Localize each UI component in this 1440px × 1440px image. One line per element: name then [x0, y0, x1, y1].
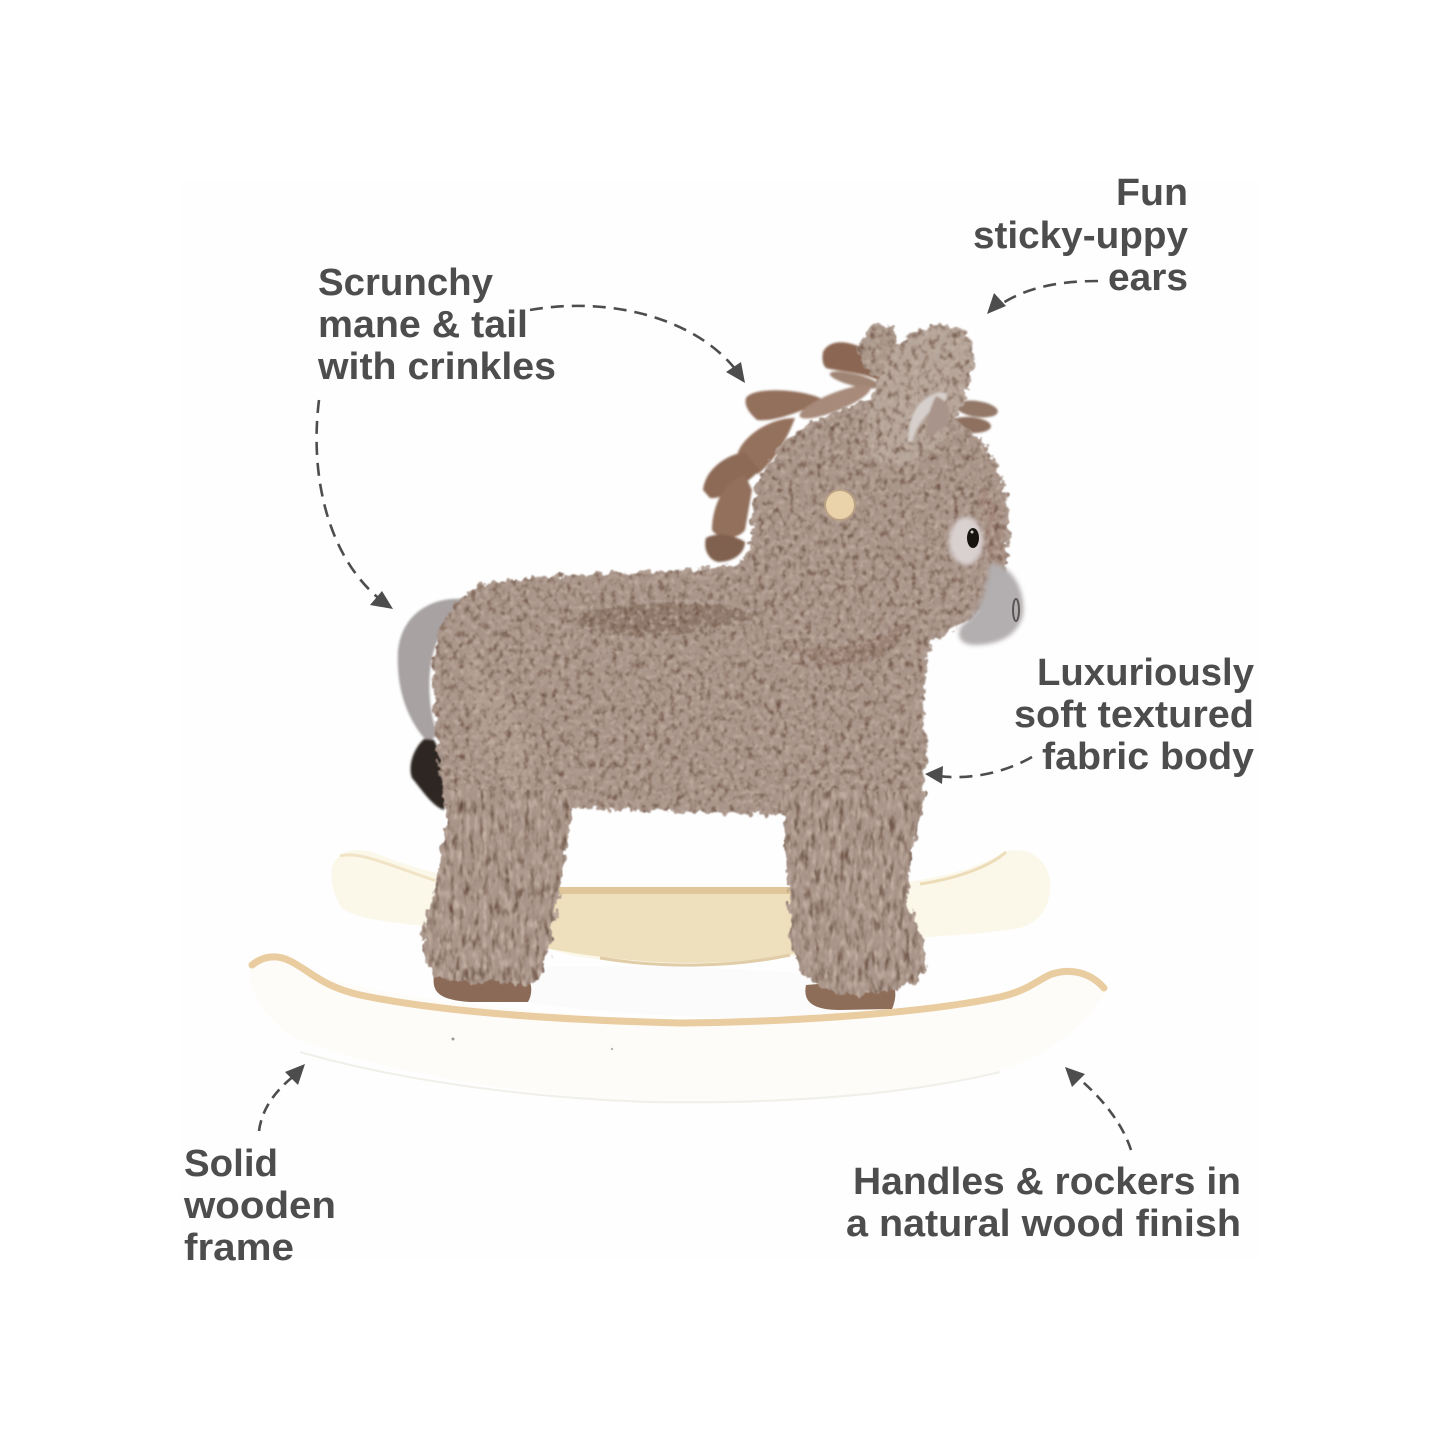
rockers label: a natural wood finish [846, 1203, 1241, 1245]
body label: Luxuriously [1037, 652, 1254, 694]
arrow: to tail [317, 400, 393, 609]
body label: fabric body [1042, 736, 1254, 778]
arrow: to body [925, 757, 1032, 784]
background panel [180, 180, 1260, 1260]
legs fur [423, 790, 926, 995]
callout: ears [973, 172, 1188, 314]
ears label: ears [1108, 257, 1188, 299]
inner ear [908, 392, 950, 442]
arrow: to mane [530, 306, 745, 383]
callout: mane [317, 262, 745, 609]
tail [398, 599, 470, 810]
callout: fabric body [925, 652, 1254, 784]
hooves [434, 970, 895, 1010]
callout: wooden frame [183, 1064, 336, 1269]
rockers label [846, 1161, 1241, 1245]
mane label: with crinkles [317, 346, 556, 388]
arrow: to rockers [1065, 1067, 1131, 1150]
ears label [973, 172, 1188, 299]
ears label: sticky-uppy [973, 215, 1188, 257]
ears label: Fun [1116, 172, 1188, 214]
back rocker [331, 850, 1050, 965]
body label [1014, 652, 1254, 778]
frame label: Solid [184, 1143, 278, 1185]
wooden peg [825, 490, 855, 520]
body label: soft textured [1014, 694, 1254, 736]
arrow: to ears [987, 281, 1098, 314]
mane label: Scrunchy [318, 262, 493, 304]
frame label [183, 1143, 336, 1269]
eye [949, 517, 983, 565]
callout: handles and rockers [846, 1067, 1241, 1245]
arrow: to frame [259, 1064, 305, 1131]
rockers label: Handles & rockers in [853, 1161, 1241, 1203]
illustration: rocking donkey [250, 324, 1106, 1102]
tail hair [410, 739, 445, 810]
mane tufts [703, 342, 999, 562]
ears fur [860, 324, 900, 376]
frame label: frame [184, 1227, 294, 1269]
body and head fur [434, 324, 1009, 850]
mane label [317, 262, 556, 388]
front rocker [250, 957, 1106, 1102]
muzzle [959, 562, 1023, 645]
mane label: mane & tail [318, 304, 528, 346]
frame label: wooden [183, 1185, 336, 1227]
